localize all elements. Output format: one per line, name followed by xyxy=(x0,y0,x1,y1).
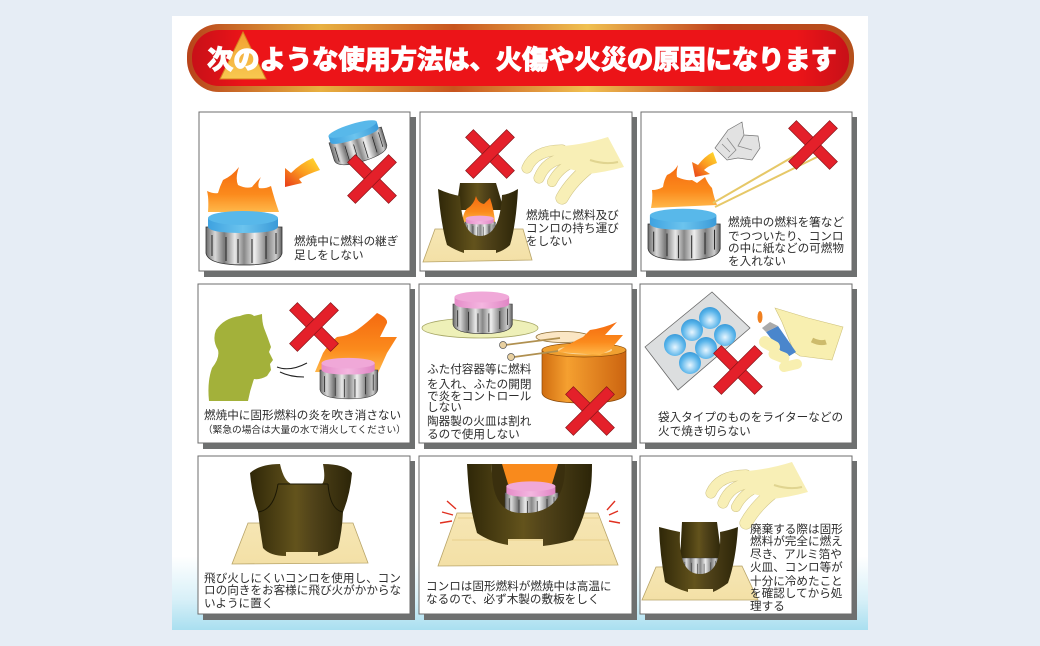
heat marks xyxy=(440,501,620,523)
chopsticks xyxy=(713,155,817,207)
tilted fuel being added xyxy=(326,116,389,169)
burner with pink fuel xyxy=(320,358,378,399)
caption: で炎をコントロール xyxy=(427,390,532,403)
caption: を入れ、ふたの開閉 xyxy=(427,378,531,391)
caption: 袋入タイプのものをライターなどの xyxy=(658,410,843,424)
caption: 燃料が完全に燃え xyxy=(750,534,843,548)
wooden board xyxy=(423,229,532,262)
caption: 燃焼中に燃料の継ぎ xyxy=(294,234,399,248)
orange pot xyxy=(542,343,626,403)
panel: do not poke fuel or add combustibles xyxy=(641,112,857,277)
flame xyxy=(651,165,717,208)
white page panel xyxy=(172,16,868,630)
icon: gloved hand xyxy=(527,137,624,198)
panel: use wooden base xyxy=(419,456,637,620)
burner with blue fuel xyxy=(648,209,720,260)
caption: 火で焼き切らない xyxy=(658,425,751,438)
panel: do not carry while burning xyxy=(420,112,637,277)
caption: 足しをしない xyxy=(294,249,364,262)
caption note: （緊急の場合は大量の水で消火してください） xyxy=(203,423,406,436)
caption: コンロの持ち運び xyxy=(526,221,619,235)
caption: でつついたり、コンロ xyxy=(728,230,843,243)
caption: の中に紙などの可燃物 xyxy=(728,241,844,255)
burner with blue fuel xyxy=(206,211,282,265)
title banner xyxy=(187,24,854,92)
cross mark xyxy=(348,155,396,203)
wooden board xyxy=(232,523,368,564)
flame xyxy=(315,313,397,373)
cross mark xyxy=(290,303,338,351)
tongs xyxy=(500,338,560,360)
caption: なるので、必ず木製の敷板をしく xyxy=(426,592,599,606)
caption: 理する xyxy=(750,600,785,613)
caption: 燃焼中に固形燃料の炎を吹き消さない xyxy=(204,408,401,422)
lid xyxy=(536,332,590,342)
caption: 火皿、コンロ等が xyxy=(750,560,843,574)
cross mark xyxy=(789,121,837,169)
wooden board xyxy=(642,566,758,600)
title text: 次のような使用方法は、火傷や火災の原因になります xyxy=(207,45,837,75)
caption: いように置く xyxy=(204,597,273,610)
arrow xyxy=(692,152,717,177)
caption: るので使用しない xyxy=(427,427,520,441)
burner with pink fuel xyxy=(453,292,512,334)
stove xyxy=(250,464,352,556)
stove with spent burner xyxy=(659,522,738,592)
crumpled paper xyxy=(715,122,760,160)
cross mark xyxy=(714,346,762,394)
gloved hand with lighter xyxy=(758,308,843,367)
cross mark xyxy=(566,387,614,435)
panel: disposal xyxy=(640,456,857,620)
panel: do not cut bag with lighter xyxy=(640,284,857,449)
icon: gloved hand xyxy=(711,462,808,523)
caption: 燃焼中に燃料及び xyxy=(526,208,619,222)
stove with burning fuel xyxy=(467,464,592,546)
caption: 廃棄する際は固形 xyxy=(750,523,843,536)
breath lines xyxy=(277,363,307,377)
caption: ロの向きをお客様に飛び火がかからな xyxy=(204,583,401,597)
caption: ふた付容器等に燃料 xyxy=(427,362,532,376)
caption: コンロは固形燃料が燃焼中は高温に xyxy=(426,579,612,593)
wooden board xyxy=(438,513,618,566)
panel: do not blow out flame xyxy=(198,284,415,449)
panel: do not refuel while burning xyxy=(199,112,416,277)
icon: warning triangle xyxy=(220,32,266,79)
cross mark xyxy=(466,130,514,178)
caption: しない xyxy=(427,401,462,414)
caption: をしない xyxy=(526,235,572,248)
flame xyxy=(557,322,623,355)
panel: stove placement xyxy=(198,456,415,620)
plate xyxy=(422,318,538,338)
panel: do not use lidded containers xyxy=(419,284,637,449)
flame xyxy=(207,167,279,212)
caption: 十分に冷めたこと xyxy=(750,574,843,588)
caption: 燃焼中の燃料を箸など xyxy=(728,215,844,229)
person silhouette xyxy=(208,314,273,401)
caption: を入れない xyxy=(728,255,786,268)
caption: 尽き、アルミ箔や xyxy=(750,547,842,561)
fuel packet xyxy=(645,292,750,390)
caption: を確認してから処 xyxy=(750,586,843,600)
caption: 陶器製の火皿は割れ xyxy=(427,414,532,428)
caption: 飛び火しにくいコンロを使用し、コン xyxy=(204,571,401,585)
arrow xyxy=(285,158,320,187)
stove with burning fuel xyxy=(438,183,518,253)
